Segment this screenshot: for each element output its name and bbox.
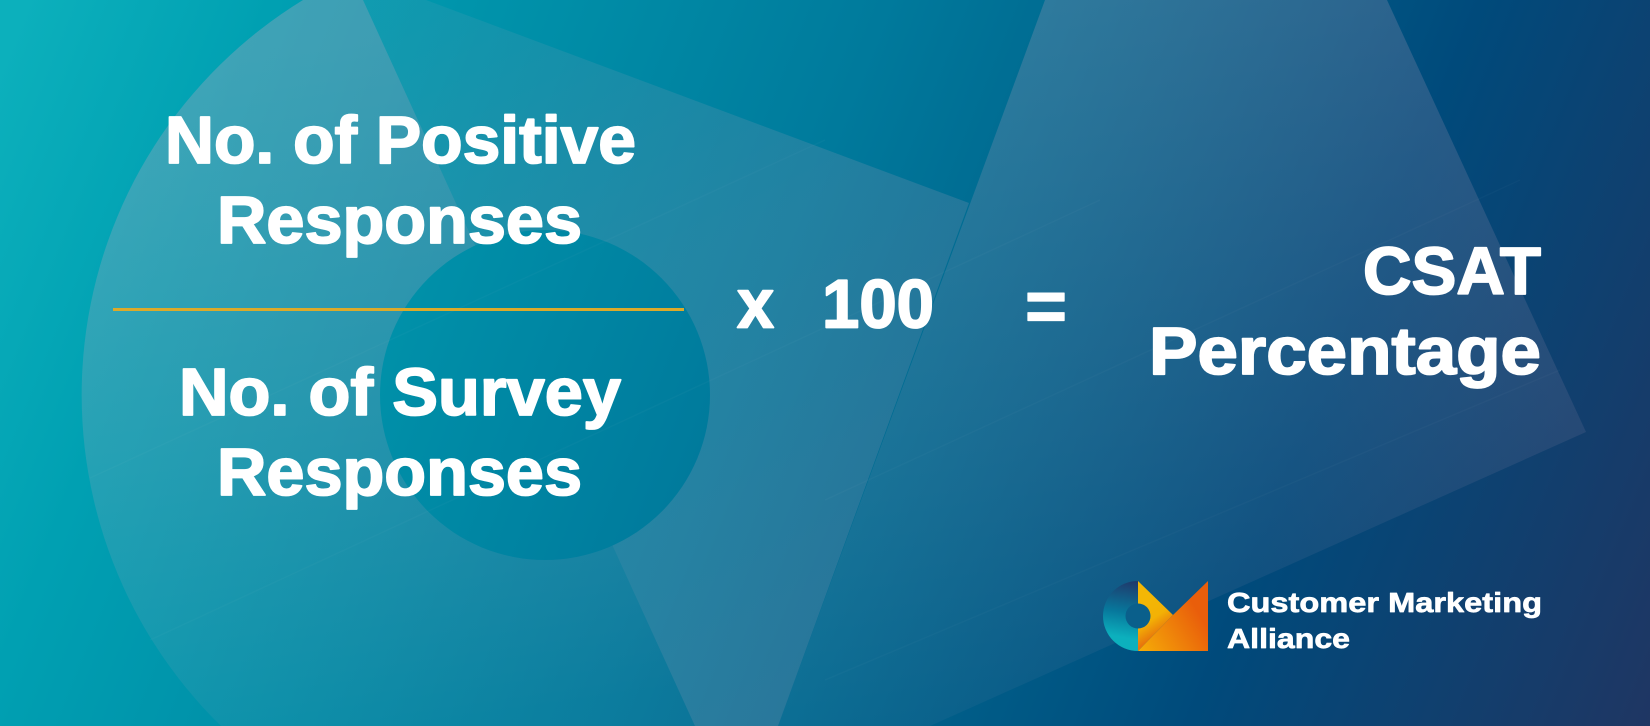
equals sign: =: [1025, 267, 1067, 347]
text: Responses: Responses: [217, 183, 582, 258]
text: Alliance: Alliance: [1227, 623, 1350, 654]
result: CSAT Percentage: [1149, 234, 1541, 389]
logo: Customer Marketing Alliance: [1103, 581, 1542, 654]
fraction denominator: [179, 355, 621, 510]
shape: donut segment: [82, 0, 695, 726]
icon: logo mark: [1103, 581, 1208, 651]
text: Responses: Responses: [217, 435, 582, 510]
logo wordmark: [1227, 587, 1542, 654]
multiply sign: x: [737, 264, 774, 342]
shape: donut hole: [380, 230, 710, 560]
text: No. of Survey: No. of Survey: [179, 355, 621, 430]
number 100: 100: [822, 266, 934, 342]
fraction divider line: [113, 308, 684, 311]
shape: central wedge: [363, 0, 969, 726]
text: CSAT: CSAT: [1363, 234, 1541, 309]
text: Customer Marketing: Customer Marketing: [1227, 587, 1542, 618]
fraction numerator: [165, 103, 636, 258]
text: Percentage: Percentage: [1149, 314, 1541, 389]
shape: large right polygon: [778, 0, 1586, 726]
text: No. of Positive: No. of Positive: [165, 103, 636, 178]
